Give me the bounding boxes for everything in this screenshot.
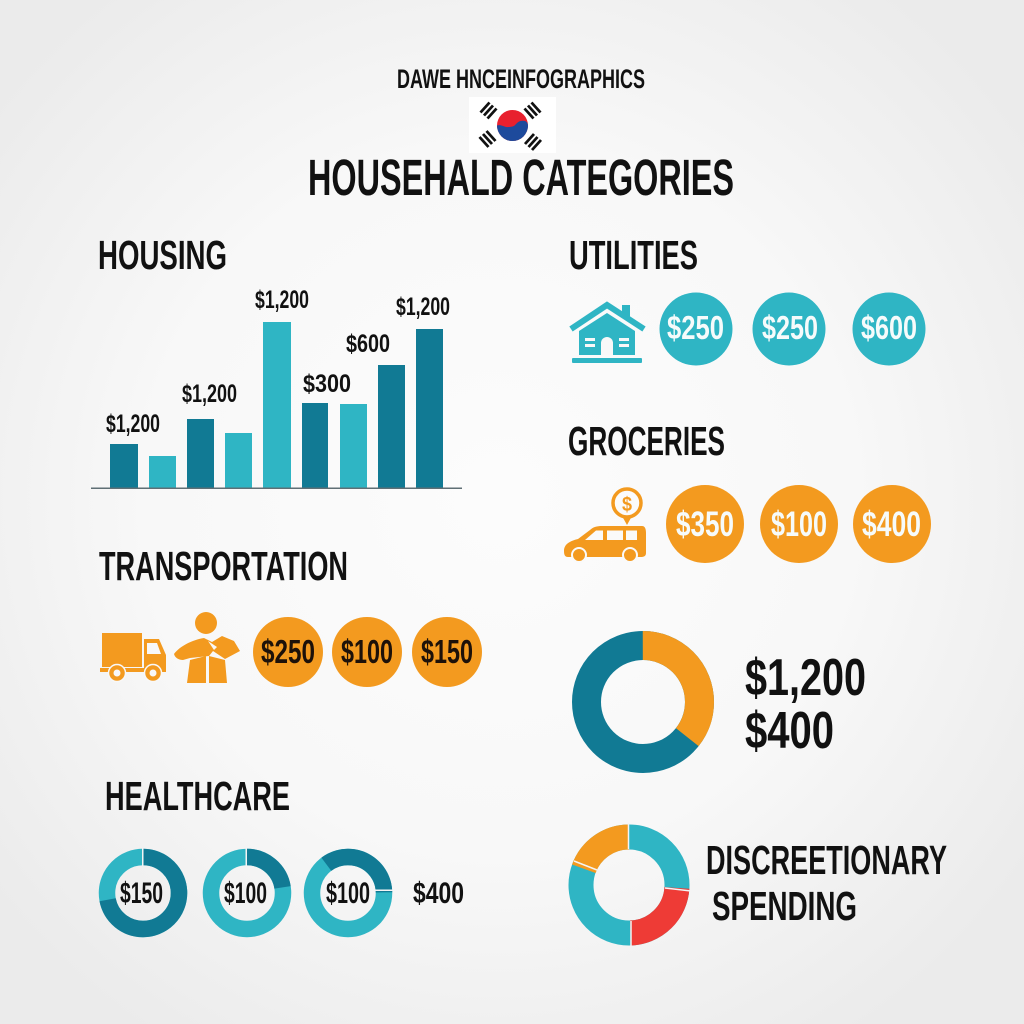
bar chart: $600 (346, 330, 390, 358)
panel: housing (91, 232, 462, 489)
value badge: $100 (760, 485, 838, 563)
value: $400: $400 (413, 877, 464, 910)
value badge: $250 (660, 292, 732, 366)
panel: groceries (564, 418, 931, 563)
icon: South Korean flag (469, 97, 556, 153)
donut: $100 (211, 848, 283, 929)
value badge: $150 (412, 617, 482, 687)
donut chart: spending split (574, 823, 691, 947)
donut: $100: $100 (326, 877, 370, 910)
donut chart: orange and teal (586, 646, 700, 758)
value badge: $250 (253, 617, 323, 687)
bar chart (91, 286, 462, 489)
panel: transportation (99, 543, 482, 687)
heading: healthcare: HEALTHCARE (105, 773, 290, 819)
panel: summary donut (586, 646, 866, 760)
icon: car with dollar pin: $ (622, 494, 632, 516)
icon: car with dollar pin (564, 489, 646, 562)
value badge: $250: $250 (667, 309, 724, 346)
value badge: $100: $100 (341, 633, 393, 670)
bar chart: $300 (303, 370, 351, 398)
value badge: $250 (752, 292, 826, 366)
value badge: $350: $350 (676, 505, 734, 544)
bar chart: $1,200 (182, 380, 237, 408)
icon: person reading (174, 612, 240, 683)
panel: discretionary spending (574, 823, 947, 947)
heading: housing: HOUSING (98, 232, 227, 278)
value badge: $250: $250 (261, 633, 315, 670)
icon: delivery truck (100, 633, 166, 682)
bar chart: $1,200 (396, 293, 450, 321)
panel: healthcare (105, 773, 464, 943)
bar chart: $1,200 (106, 410, 160, 438)
subtitle: DAWE HNCEINFOGRAPHICS (397, 64, 645, 94)
value badge: $400 (853, 485, 931, 563)
icon: house (571, 305, 644, 363)
value badge: $600 (852, 292, 926, 366)
value badge: $100 (332, 617, 402, 687)
value badge: $400: $400 (862, 505, 921, 544)
heading: transportation: TRANSPORTATION (99, 543, 348, 589)
value badge: $100: $100 (771, 505, 827, 544)
donut: $150: $150 (120, 877, 163, 910)
value badge: $250: $250 (762, 309, 818, 346)
heading: groceries: GROCERIES (568, 418, 725, 464)
value: $1,200: $1,200 (745, 649, 866, 707)
value: $400: $400 (745, 702, 834, 760)
value badge: $600: $600 (861, 309, 917, 346)
heading: discretionary spending: SPENDING (712, 883, 857, 929)
value badge: $350 (666, 485, 744, 563)
donut: $150 (107, 848, 179, 929)
heading: utilities: UTILITIES (569, 232, 698, 278)
value badge: $150: $150 (421, 633, 473, 670)
bar chart: $1,200 (255, 286, 309, 314)
header (308, 64, 734, 206)
heading: discretionary spending (706, 837, 947, 929)
donut: $100: $100 (224, 877, 267, 910)
title: HOUSEHALD CATEGORIES (308, 149, 734, 206)
panel: utilities (569, 232, 926, 366)
donut: $100 (298, 843, 398, 943)
